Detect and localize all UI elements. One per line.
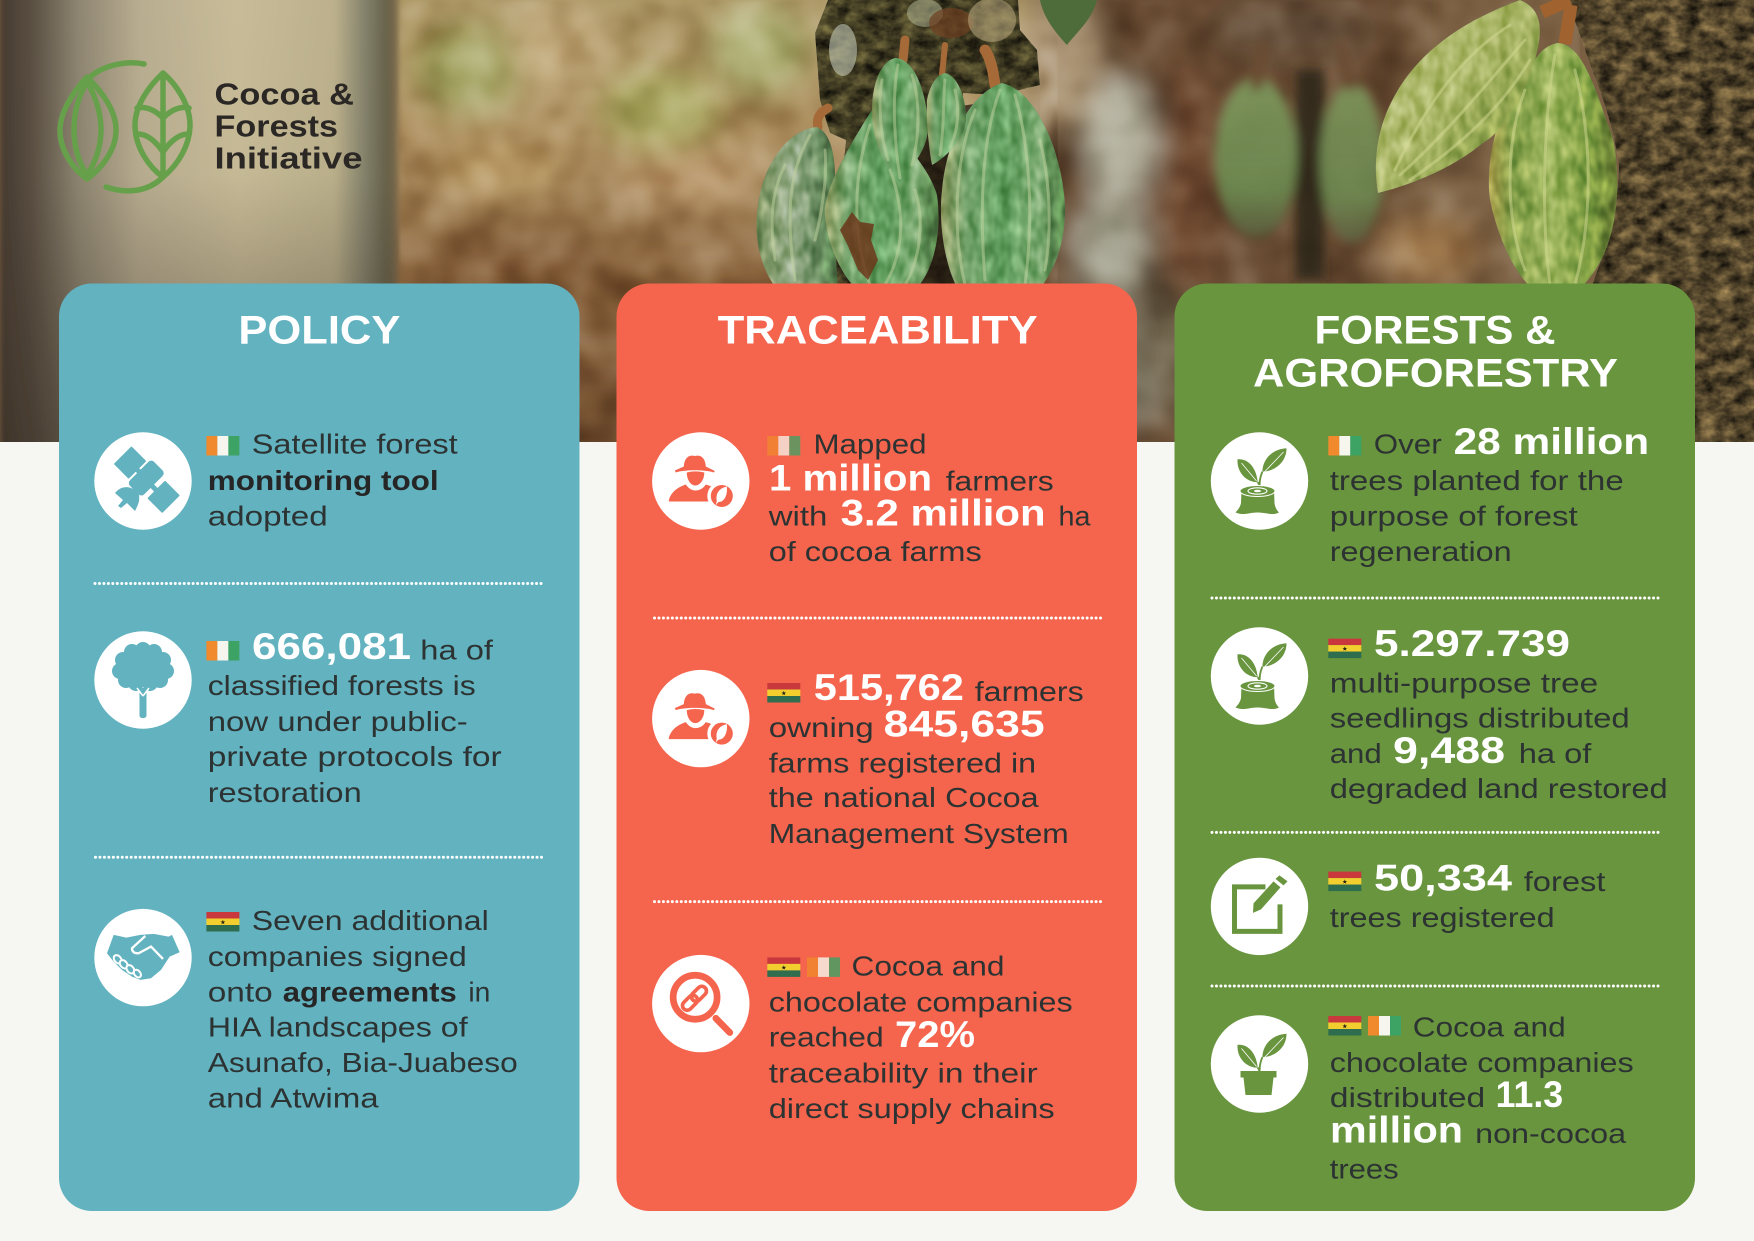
pod ribs [772, 65, 1049, 285]
flag: Ghana [767, 957, 800, 977]
text: trees planted: regeneration [1330, 536, 1512, 567]
text: registered farmers: farmers [975, 676, 1084, 707]
icon: tree [94, 631, 192, 729]
text: hectares: private protocols for [208, 741, 502, 772]
text: agreements: Asunafo, Bia-Juabeso [208, 1047, 518, 1078]
heading: traceability: TRACEABILITY [718, 308, 1038, 352]
icon: satellite [94, 432, 192, 530]
text: hectares: now under public- [208, 706, 468, 737]
heading: forests & agroforestry: AGROFORESTRY [1253, 352, 1618, 396]
flag: Ghana [206, 912, 239, 932]
item: trees planted [1211, 421, 1649, 567]
text: traceability share: 72% [895, 1014, 975, 1055]
item: classified forests [94, 626, 502, 808]
text: non-cocoa trees: Cocoa and [1413, 1012, 1566, 1042]
icon: potted plant [1211, 1015, 1308, 1113]
right tree trunk [1567, 0, 1754, 442]
heading: policy: POLICY [238, 308, 401, 352]
text: satellite: Satellite forest [252, 428, 458, 460]
text: trees planted: Over [1374, 428, 1442, 460]
text: traceability share: chocolate companies [769, 986, 1073, 1017]
flag: Côte d'Ivoire [206, 436, 239, 456]
logo wordmark: Forests [214, 109, 338, 144]
text: agreements: companies signed [208, 941, 467, 972]
text: agreements: and Atwima [208, 1082, 379, 1114]
text: traceability share [769, 950, 1073, 1124]
panel: traceability [616, 284, 1137, 1211]
text: hectares [208, 626, 502, 808]
text: forest trees: trees registered [1330, 902, 1555, 933]
text: agreements: agreements [283, 976, 457, 1007]
text: agreements: in [468, 976, 490, 1008]
logo wordmark: Initiative [214, 140, 362, 175]
text: seedlings: multi-purpose tree [1330, 668, 1598, 698]
blurred background pods [1215, 40, 1384, 280]
item: traceability share [652, 950, 1073, 1124]
mottled texture [398, 0, 1058, 442]
text: seedlings: seedlings distributed [1330, 702, 1630, 734]
left blurred trunk [0, 0, 398, 452]
logo: Cocoa & Forests Initiative [60, 63, 362, 191]
logo wordmark: Cocoa & [214, 77, 354, 112]
text: forest trees [1330, 858, 1606, 933]
text: registered farmers: the national Cocoa [769, 782, 1039, 813]
text: traceability share: Cocoa and [851, 950, 1004, 982]
text: satellite: adopted [208, 500, 328, 532]
text: traceability share: traceability in their [769, 1058, 1038, 1089]
icon: handshake [94, 909, 192, 1006]
text: non-cocoa trees: million [1330, 1109, 1463, 1150]
flag: Ghana [1328, 639, 1361, 658]
icon: stump with sprout [1211, 432, 1308, 530]
text: hectares: classified forests is [208, 670, 476, 701]
text: agreements: Seven additional [252, 905, 489, 936]
text: mapped: farmers [946, 466, 1054, 496]
flag: Côte d'Ivoire [1368, 1016, 1401, 1036]
photo: cocoa pods on trees [0, 0, 1754, 480]
text: traceability share: direct supply chains [769, 1093, 1055, 1124]
panel: policy [59, 284, 580, 1211]
heading: forests & agroforestry: FORESTS & [1314, 308, 1556, 352]
text: registered farmers: owning [769, 712, 874, 743]
text: non-cocoa trees [1330, 1012, 1634, 1184]
pods [756, 0, 1617, 300]
text: registered farmers: 845,635 [884, 704, 1045, 745]
flag: Côte d'Ivoire [767, 436, 800, 456]
icon: magnifier with chain [652, 955, 750, 1052]
text: mapped: of cocoa farms [769, 536, 982, 567]
text: hectares: 666,081 [252, 626, 411, 667]
text: seedlings [1330, 623, 1668, 804]
text: seedlings: and [1330, 738, 1382, 769]
text: mapped: with [768, 500, 827, 532]
text: mapped: Mapped [813, 428, 926, 460]
text: trees planted: trees planted for the [1330, 465, 1624, 496]
text: non-cocoa trees: 11.3 [1496, 1074, 1563, 1115]
text: trees planted [1330, 421, 1649, 567]
text: registered farmers: farms registered in [769, 748, 1036, 778]
text: mapped: 1 million [769, 457, 932, 498]
text: mapped: ha [1059, 500, 1091, 532]
leaf top [1040, 0, 1097, 45]
text: mapped [768, 428, 1091, 567]
flag: Côte d'Ivoire [1328, 436, 1361, 456]
flag: Ghana [1328, 872, 1361, 891]
text: agreements: HIA landscapes of [208, 1012, 468, 1042]
text: agreements: onto [208, 976, 273, 1008]
text: non-cocoa trees: chocolate companies [1330, 1047, 1634, 1078]
flag: Ghana [767, 683, 800, 702]
item: forest trees registered [1211, 858, 1606, 955]
logo mark: pod, leaf and circle [60, 63, 190, 191]
icon: stump with sprout [1211, 627, 1308, 725]
flag: Côte d'Ivoire [807, 957, 840, 977]
text: forest trees: forest [1524, 866, 1606, 897]
logo wordmark [214, 77, 362, 175]
text: registered farmers: Management System [769, 818, 1069, 849]
centre tree trunk [815, 0, 1040, 300]
heading: forests & agroforestry [1253, 308, 1618, 396]
item: satellite monitoring [94, 428, 458, 532]
text: non-cocoa trees: trees [1330, 1153, 1399, 1184]
stems [817, 40, 995, 127]
flag: Ghana [1328, 1016, 1361, 1036]
text: trees planted: purpose of forest [1330, 500, 1578, 532]
panel: forests & agroforestry [1174, 284, 1695, 1211]
text: satellite: monitoring tool [208, 465, 439, 496]
text: registered farmers: 515,762 [814, 667, 964, 708]
item: mapped farmers [652, 428, 1091, 567]
icon: farmer [652, 432, 750, 530]
item: agreements [94, 905, 518, 1114]
text: seedlings: degraded land restored [1330, 773, 1668, 804]
text: seedlings: 5.297.739 [1374, 623, 1570, 664]
text: registered farmers [769, 667, 1084, 849]
flag: Côte d'Ivoire [206, 641, 239, 660]
icon: pencil and note [1211, 858, 1308, 955]
text: traceability share: reached [769, 1022, 884, 1052]
text: non-cocoa trees: non-cocoa [1475, 1118, 1627, 1149]
text: mapped: 3.2 million [841, 492, 1046, 533]
text: trees planted: 28 million [1454, 421, 1649, 462]
icon: farmer [652, 670, 750, 767]
blurred forest background [360, 0, 1500, 480]
text: hectares: ha of [420, 634, 493, 666]
text: hectares: restoration [208, 777, 362, 808]
text: satellite [208, 428, 458, 532]
item: seedlings [1211, 623, 1668, 804]
item: registered farmers [652, 667, 1084, 849]
text: forest trees: 50,334 [1374, 858, 1513, 899]
text: agreements [208, 905, 518, 1114]
text: seedlings: 9,488 [1393, 730, 1505, 771]
item: non-cocoa trees [1211, 1012, 1634, 1184]
text: seedlings: ha of [1519, 738, 1592, 769]
text: non-cocoa trees: distributed [1330, 1082, 1485, 1113]
